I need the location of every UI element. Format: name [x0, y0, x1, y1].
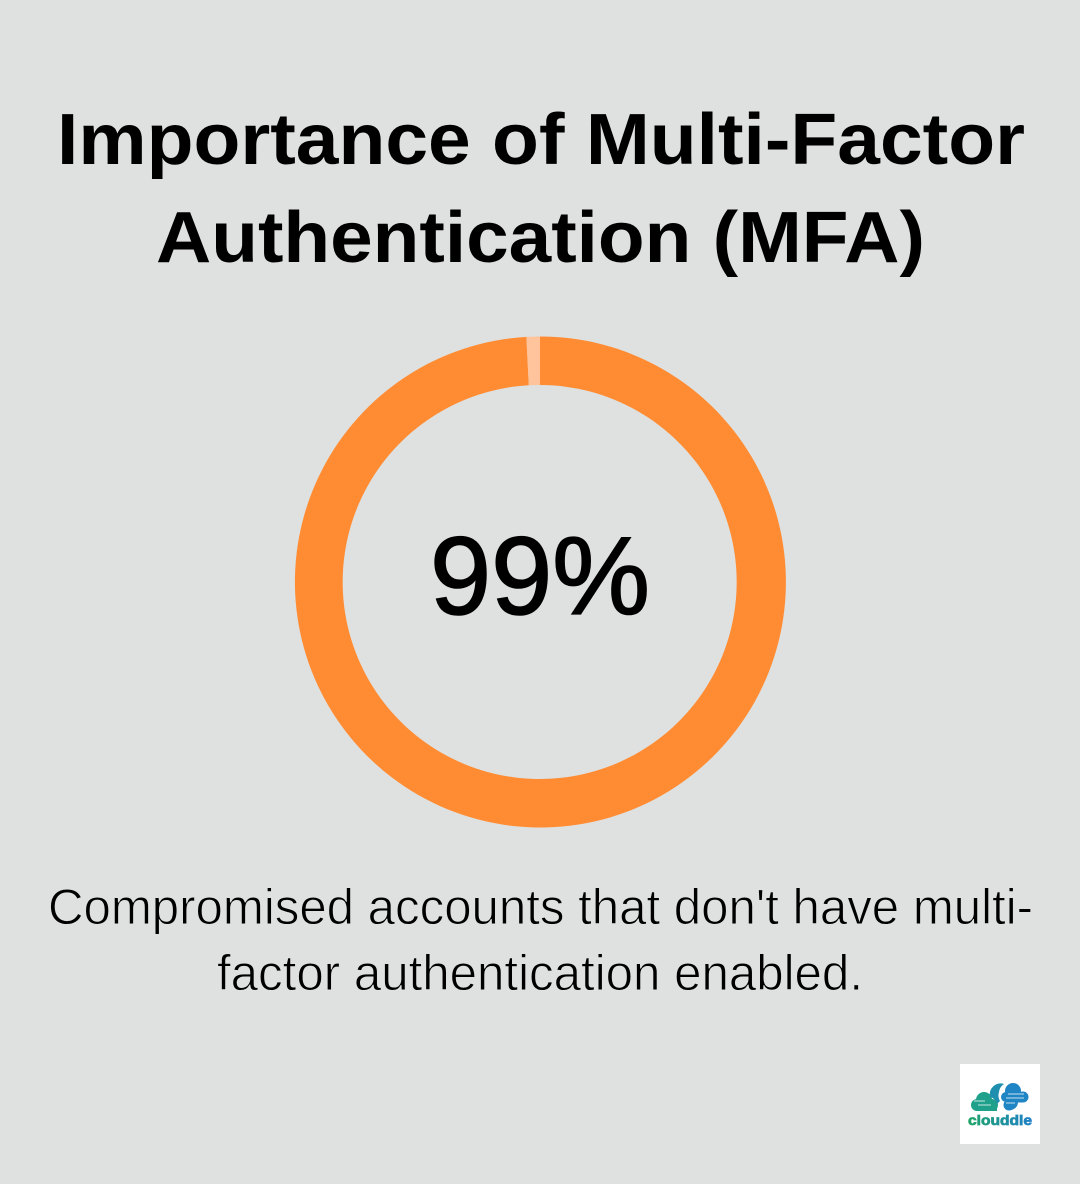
- crescent: [990, 1083, 1004, 1104]
- center value: 99%: 99%: [430, 515, 650, 638]
- logo: clouddle: [960, 1064, 1040, 1144]
- description text: [48, 879, 1033, 1001]
- description text: factor authentication enabled.: [217, 945, 863, 1001]
- donut segment: 99 percent: [295, 336, 786, 827]
- title: Authentication (MFA): [156, 198, 925, 278]
- left cloud: [971, 1092, 998, 1111]
- right cloud: [1001, 1083, 1028, 1110]
- donut segment: remaining 1 percent: [526, 336, 540, 385]
- title: [57, 100, 1025, 278]
- donut chart: 99%: [295, 336, 786, 827]
- logo background: [960, 1064, 1040, 1144]
- title: Importance of Multi-Factor: [57, 100, 1025, 180]
- logo cloud icon: [971, 1083, 1028, 1111]
- description text: Compromised accounts that don't have multi-: [48, 879, 1033, 935]
- logo wordmark: clouddle: [968, 1112, 1032, 1128]
